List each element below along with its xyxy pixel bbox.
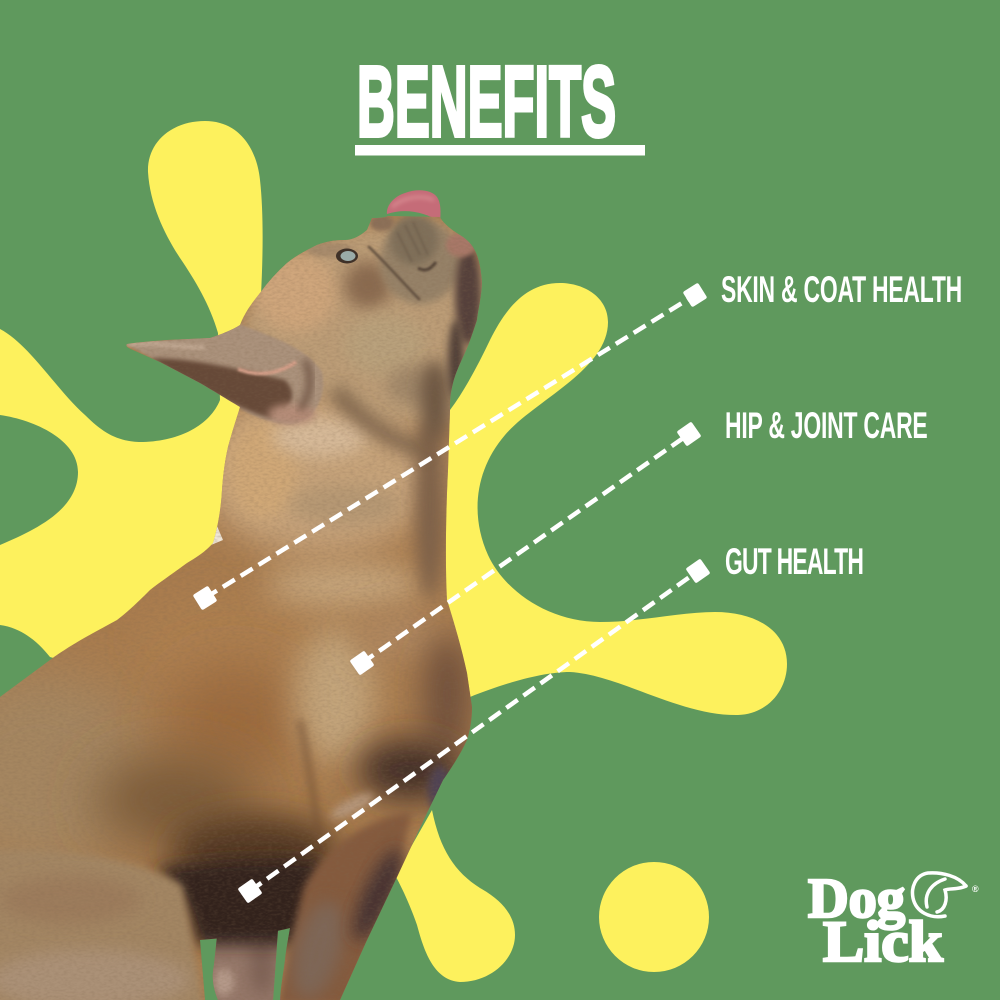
dog muzzle xyxy=(368,215,481,400)
logo: Dog Lick xyxy=(808,868,979,974)
dog head xyxy=(240,222,490,450)
label: hip and joint care: HIP & JOINT CARE xyxy=(725,404,928,446)
dog front leg xyxy=(278,812,412,1000)
label: gut health: GUT HEALTH xyxy=(725,540,864,582)
dog neck xyxy=(200,385,445,600)
logo: Dog Lick: Lick xyxy=(823,909,944,974)
yellow paint splat xyxy=(0,121,787,982)
title: BENEFITS xyxy=(355,46,645,158)
dog body shading xyxy=(0,563,471,945)
dog photo illustration xyxy=(0,190,500,1000)
dog back leg xyxy=(212,940,281,1000)
dog tongue xyxy=(387,190,441,222)
yellow dot xyxy=(599,862,709,972)
registered mark: ® xyxy=(972,884,979,894)
dog eye xyxy=(336,248,358,264)
fur texture xyxy=(0,190,500,1000)
title: BENEFITS: BENEFITS xyxy=(357,46,616,158)
dog ear xyxy=(124,324,323,424)
label: skin and coat health: SKIN & COAT HEALTH xyxy=(721,268,962,310)
pointer: skin and coat health xyxy=(193,283,707,610)
pointer: hip and joint care xyxy=(349,421,702,676)
pointer: gut health xyxy=(237,558,711,904)
logo: Dog Lick: Dog xyxy=(808,868,905,930)
logo tongue mark xyxy=(913,873,966,917)
dog haunch xyxy=(0,850,205,1000)
